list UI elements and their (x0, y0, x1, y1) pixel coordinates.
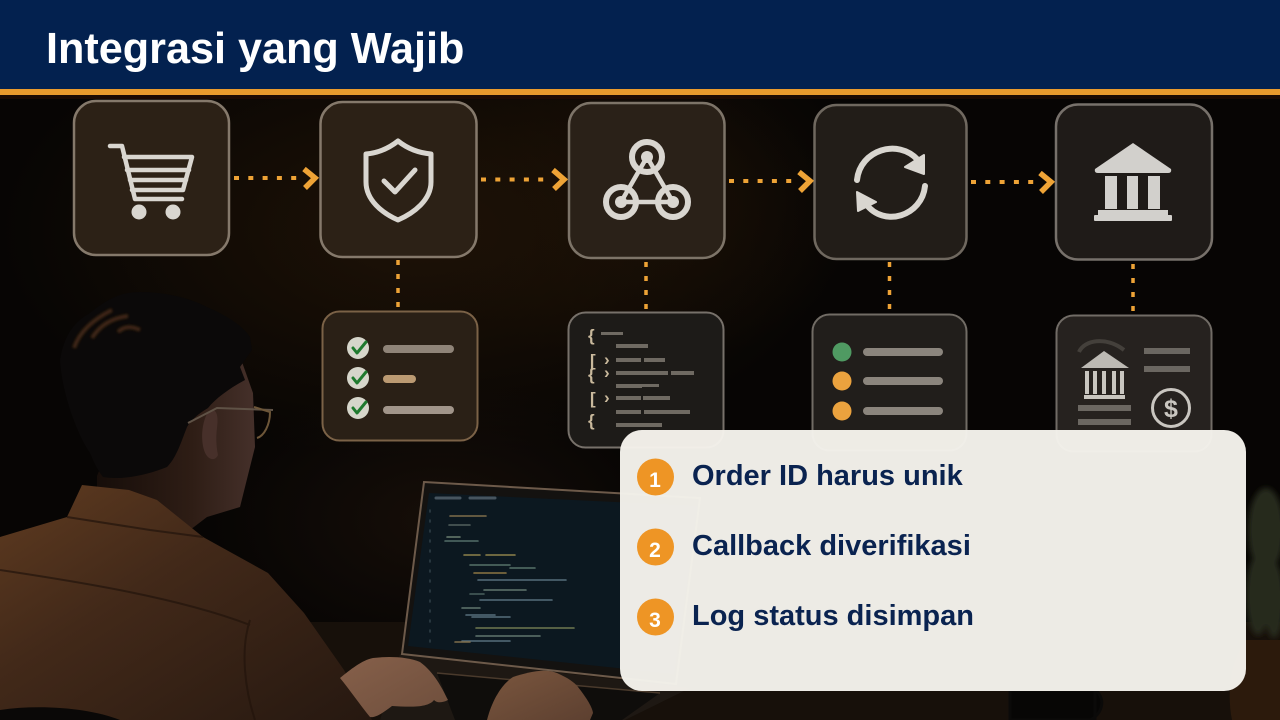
panel: requirements (620, 430, 1246, 691)
orange accent rule (0, 89, 1280, 95)
requirement 3: 3 (649, 609, 661, 632)
shirt (0, 485, 372, 720)
arrow: shield to webhook (481, 170, 564, 189)
horizontal dotted arrows (234, 169, 1051, 192)
detail card: code: [ (590, 389, 596, 408)
arrow: webhook to sync (729, 172, 810, 191)
icon: shield with check (366, 141, 431, 220)
laptop base and keyboard (380, 654, 690, 720)
detail card: code: { (588, 365, 595, 384)
requirement 1: 1 (649, 469, 661, 492)
ear (202, 410, 218, 459)
laptop lid (402, 482, 700, 684)
laptop (380, 482, 700, 720)
icon: shopping cart (110, 146, 192, 220)
card: webhook (569, 103, 724, 258)
card: sync (814, 105, 966, 259)
detail card: code (568, 312, 724, 448)
detail card: code: › (604, 363, 610, 382)
right hand (487, 671, 593, 720)
title: Integrasi yang Wajib (46, 25, 464, 73)
icon: bank (1094, 143, 1172, 221)
card: bank (1056, 104, 1212, 260)
requirement 2: 2 (649, 539, 661, 562)
detail card: settlement (1056, 316, 1212, 452)
plant and pot (1230, 488, 1280, 720)
chair back (0, 707, 120, 720)
card: shield (320, 102, 476, 257)
icon: sync arrows (857, 149, 925, 217)
header bar (0, 0, 1280, 89)
workflow step cards (74, 101, 1212, 260)
laptop screen with code (408, 493, 698, 674)
vertical dotted connectors (398, 260, 1133, 312)
requirement 2: Callback diverifikasi (692, 530, 971, 562)
glasses (188, 407, 273, 438)
detail card: code: › (604, 388, 610, 407)
detail card: code: [ (590, 351, 596, 370)
requirement 1: Order ID harus unik (692, 460, 964, 492)
arrow: cart to shield (234, 169, 315, 188)
icon: webhook (606, 142, 688, 217)
desk surface (310, 622, 1280, 720)
detail card: code: { (588, 326, 595, 345)
detail card: code: { (588, 411, 595, 430)
coffee mug (1010, 690, 1102, 720)
detail card: settlement: $ (1164, 395, 1178, 423)
person at laptop (0, 292, 593, 720)
left hand (340, 657, 448, 717)
detail card: code: › (604, 350, 610, 369)
neck and face (97, 362, 255, 530)
requirement 3: Log status disimpan (692, 600, 974, 632)
arrow: sync to bank (971, 173, 1051, 192)
card: cart (74, 101, 229, 255)
detail card: checklist (322, 312, 478, 440)
hair (60, 292, 252, 478)
detail card: status list (812, 314, 966, 450)
